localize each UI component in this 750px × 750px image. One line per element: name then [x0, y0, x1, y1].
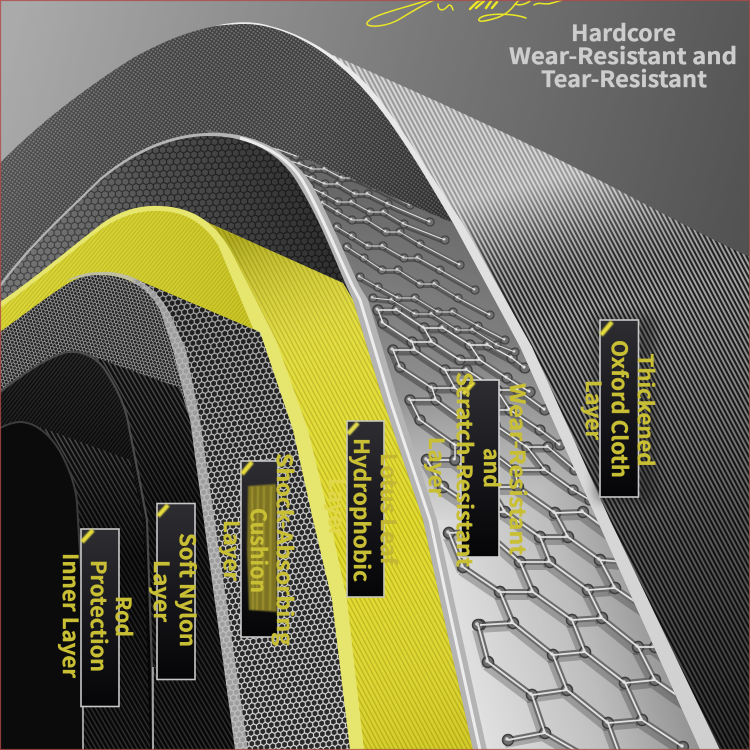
- layer: rod protection, inner front face: [0, 422, 83, 750]
- label: soft nylon layer: Layer: [147, 560, 177, 623]
- title: Tear-Resistant: [541, 62, 708, 94]
- layer: shock-absorbing cushion, front face: [0, 275, 235, 750]
- label: shock-absorbing cushion layer: Shock-Absorbing: [270, 453, 300, 647]
- layer: lotus leaf hydrophobic, front face: [0, 208, 350, 750]
- title: Wear-Resistant and: [509, 39, 737, 71]
- label: lotus leaf hydrophobic layer: Lotus Leaf: [374, 453, 404, 566]
- label: wear-resistant and scratch-resistant layer: and: [477, 448, 507, 488]
- layer: lotus leaf hydrophobic, pale rim: [0, 206, 364, 750]
- label: thickened oxford cloth layer: Oxford Cloth: [605, 340, 635, 478]
- layer: lotus leaf hydrophobic, side surface: [187, 213, 473, 750]
- label: thickened oxford cloth layer: Layer: [579, 380, 609, 441]
- cushion swatch inside label: [247, 484, 277, 612]
- layer: wear and scratch resistant, front face: [0, 135, 473, 750]
- layer: soft nylon, dark rim: [0, 352, 153, 750]
- label: shock-absorbing cushion layer: Cushion: [244, 508, 274, 593]
- label: soft nylon layer: [147, 504, 203, 680]
- title: Hardcore: [571, 16, 676, 48]
- layer: thickened oxford cloth, side surface: [333, 55, 750, 750]
- label: lotus leaf hydrophobic layer: Layer: [322, 478, 352, 538]
- white edge lines at the foot of the inner layers: [83, 667, 153, 750]
- layer: shock-absorbing cushion, mesh rim: [66, 272, 248, 750]
- label: wear-resistant and scratch-resistant layer: Layer: [422, 437, 452, 498]
- layer: soft nylon, side surface: [83, 353, 235, 750]
- layer: thickened oxford cloth, white rim: [215, 22, 720, 750]
- label: thickened oxford cloth layer: [579, 316, 661, 502]
- signature flourish: [367, 0, 562, 26]
- label: rod protection inner layer: Rod: [109, 596, 139, 637]
- hexagonal rod lattice: [200, 120, 695, 750]
- layer: soft nylon, front face: [0, 352, 153, 750]
- label: wear-resistant and scratch-resistant layer: [422, 372, 533, 567]
- layer: rod protection, side surface: [40, 427, 150, 750]
- label: thickened oxford cloth layer: Thickened: [631, 354, 661, 466]
- label: shock-absorbing cushion layer: Layer: [217, 520, 247, 582]
- layer: rod protection, rim: [0, 422, 83, 750]
- layer: wear and scratch resistant, side base: [205, 130, 700, 750]
- title: [509, 16, 737, 94]
- label: lotus leaf hydrophobic layer: Hydrophobic: [347, 438, 377, 582]
- layer: wear and scratch resistant, grey rim: [0, 133, 487, 750]
- label: wear-resistant and scratch-resistant layer: Scratch-Resistant: [450, 372, 480, 567]
- label: rod protection inner layer: Protection: [84, 560, 114, 672]
- label: wear-resistant and scratch-resistant layer: Wear-Resistant: [503, 383, 533, 555]
- label: shock-absorbing cushion layer: [217, 453, 300, 647]
- label: soft nylon layer: Soft Nylon: [173, 533, 203, 647]
- label: rod protection inner layer: [56, 529, 139, 706]
- label: lotus leaf hydrophobic layer: [322, 421, 404, 597]
- layer: shock-absorbing cushion, side surface: [133, 278, 350, 750]
- label: rod protection inner layer: Inner Layer: [56, 553, 86, 679]
